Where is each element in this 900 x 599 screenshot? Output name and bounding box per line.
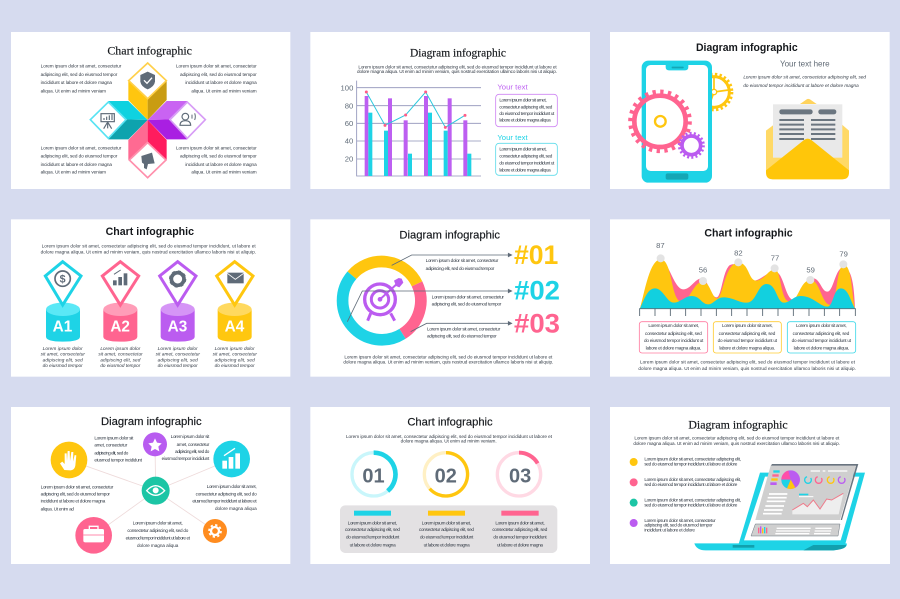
node: gear	[203, 519, 227, 543]
title: Diagram infographic	[410, 46, 506, 60]
list item: pink	[630, 477, 741, 487]
callout: cyan: labore et dolore magna aliqua	[499, 167, 551, 172]
caption panel: consectetur adipiscing elit, sed	[419, 527, 474, 532]
footer text: dolore magna aliqua. Ut enim ad minim veniam, quis nostrud exercitation ullamco laboris nisi ut aliquip.	[343, 360, 553, 365]
column: A2: sit amet, consectetur	[98, 351, 143, 356]
area chart: 82	[734, 248, 743, 257]
panel: bar and line chart	[310, 32, 590, 189]
column: A4	[213, 262, 257, 368]
panel: four cylinders	[11, 219, 290, 377]
title: Chart infographic	[106, 226, 194, 238]
text block: right	[192, 484, 257, 511]
ring: 01: 01	[362, 465, 385, 487]
text block: bottom left	[41, 146, 122, 175]
text block: right: dolore magna aliqua	[215, 506, 257, 511]
caption panel: do eiusmod tempor incididunt	[346, 534, 400, 539]
list item: purple	[630, 518, 716, 532]
callout box: cyan: do eiusmod tempor incididunt ut	[792, 338, 852, 343]
panel: hub and spoke diagram	[11, 407, 290, 564]
area chart: 59	[806, 265, 815, 274]
node: hand	[51, 442, 87, 478]
column: A1: A1	[53, 319, 73, 336]
footer text	[343, 354, 553, 365]
intro text: Lorem ipsum dolor sit amet, consectetur adipiscing elit, sed do eiusmod tempor incididunt, ut labore et	[42, 244, 256, 249]
callout box: yellow: do eiusmod tempor incididunt ut	[718, 338, 778, 343]
text block: hand: eiusmod tempor incididunt	[94, 458, 143, 463]
area chart: 56	[699, 265, 707, 274]
column: A3: A3	[168, 319, 187, 336]
text block: star	[162, 434, 210, 461]
intro text: dolore magna aliqua. Ut enim ad minim veniam, quis nostrud exercitation ullamco laboris nisi ut aliquip.	[633, 441, 840, 446]
text block: 02	[432, 295, 504, 307]
text block: hand: Lorem ipsum dolor sit	[94, 436, 134, 441]
number: #03: #03	[514, 308, 560, 338]
panel: target ring diagram	[310, 219, 590, 377]
callout: cyan: do eiusmod tempor incididunt ut	[499, 160, 555, 165]
callout box: cyan	[787, 322, 856, 353]
text block: top left: adipiscing elit, sed do eiusmod tempor	[41, 72, 118, 77]
text block: bottom: Lorem ipsum dolor sit amet,	[133, 521, 183, 526]
text block: star: Lorem ipsum dolor sit	[171, 434, 210, 439]
text block: top right: Lorem ipsum dolor sit amet, consectetur	[176, 63, 257, 68]
callout: purple: labore et dolore magna aliqua	[499, 118, 551, 123]
callout: purple: Your text	[497, 83, 529, 92]
text block: 01: adipiscing elit, sed do eiusmod tempor	[426, 266, 495, 271]
title: Diagram infographic	[696, 42, 798, 54]
list item: purple: Lorem ipsum dolor sit amet, consectetur	[644, 518, 716, 523]
caption panel	[340, 505, 557, 553]
area chart: 77	[771, 254, 779, 263]
callout box: pink	[639, 322, 708, 353]
intro text: dolore magna aliqua. Ut enim ad minim veniam, quis nostrud exercitation ullamco laboris nisi ut aliquip.	[41, 250, 256, 255]
bar chart: 80	[345, 101, 353, 110]
column: A3: adipiscing elit, sed	[158, 357, 198, 362]
intro text	[346, 434, 553, 444]
callout box: yellow: labore et dolore magna aliqua.	[719, 346, 775, 351]
text block: top left: incididunt ut labore et dolore magna	[41, 80, 112, 85]
text block: hand: adipiscing elit, sed do	[94, 450, 129, 455]
intro text	[357, 64, 557, 74]
list item: yellow: sed do eiusmod tempor incididunt ut labore et dolore	[644, 462, 738, 467]
text block: bottom left: aliqua. Ut enim ad minim veniam	[41, 170, 106, 175]
number: #02: #02	[514, 275, 560, 305]
petal: cyan with presentation icon	[90, 101, 148, 139]
column: A1: adipiscing elit, sed	[43, 357, 83, 362]
area chart	[639, 241, 856, 316]
text block: 03: adipiscing elit, sed do eiusmod tempor	[427, 333, 497, 338]
callout: purple: Lorem ipsum dolor sit amet,	[499, 98, 547, 103]
text block: bottom: eiusmod tempor incididunt ut labore et	[126, 535, 191, 540]
ring: 02	[424, 453, 468, 496]
column: A3: Lorem ipsum dolor	[158, 346, 198, 351]
list item: purple: incididunt ut labore et dolore	[644, 527, 695, 532]
column: A2: A2	[110, 319, 130, 336]
caption panel: consectetur adipiscing elit, sed	[492, 527, 548, 532]
callout box: cyan: Lorem ipsum dolor sit amet,	[796, 323, 847, 328]
callout: cyan: Lorem ipsum dolor sit amet,	[499, 146, 547, 151]
text block: left: incididunt ut labore et dolore magna	[41, 499, 106, 504]
text block: bottom left: Lorem ipsum dolor sit amet, consectetur	[41, 146, 122, 151]
panel: progress rings	[310, 407, 590, 564]
title: Chart infographic	[407, 417, 493, 429]
column: A1: Lorem ipsum dolor	[43, 346, 83, 351]
list item: teal: Lorem ipsum dolor sit amet, consectetur adipiscing elit,	[644, 498, 741, 503]
callout: cyan: consectetur adipiscing elit, sed	[499, 153, 553, 158]
text block: Lorem ipsum dolor sit amet, consectetur adipiscing elit, sed	[743, 74, 866, 79]
list item: purple: adipiscing elit, sed do eiusmod tempor	[644, 523, 713, 528]
text block: bottom: consectetur adipiscing elit, sed do	[127, 528, 189, 533]
text block: right: consectetur adipiscing elit, sed do	[196, 492, 257, 497]
column: A3: sit amet, consectetur	[156, 351, 200, 356]
caption panel: do eiusmod tempor incididunt	[493, 534, 547, 539]
ring: 03: 03	[509, 465, 531, 487]
petal: pink with megaphone icon	[128, 120, 167, 178]
node: star	[143, 432, 167, 456]
column: A4: A4	[225, 319, 245, 336]
title: Diagram infographic	[399, 230, 501, 242]
text block: 01: Lorem ipsum dolor sit amet, consectetur	[426, 258, 499, 263]
subheading: Your text here	[780, 59, 830, 68]
node: briefcase	[75, 517, 112, 554]
text block: 03	[427, 326, 501, 338]
callout box: cyan: labore et dolore magna aliqua.	[794, 346, 849, 351]
footer text: Lorem ipsum dolor sit amet, consectetur adipiscing elit, sed do eiusmod tempor incididunt ut labore et	[344, 354, 553, 359]
icon: phone	[642, 61, 712, 183]
column: A4: adipiscing elit, sed	[215, 357, 255, 362]
panel: laptop dashboard	[610, 407, 890, 564]
text block: bottom right: incididunt ut labore et dolore magna	[185, 162, 257, 167]
icon: purple gear	[679, 133, 703, 157]
intro text	[41, 244, 256, 255]
footer text: Lorem ipsum dolor sit amet, consectetur adipiscing elit, sed do eiusmod tempor incididunt ut labore et	[640, 360, 856, 365]
text block: top right: adipiscing elit, sed do eiusmod tempor	[180, 72, 257, 77]
title: Diagram infographic	[688, 417, 788, 431]
text block: 02: adipiscing elit, sed do eiusmod tempor	[432, 302, 502, 307]
callout box: yellow	[713, 322, 781, 353]
callout: purple: do eiusmod tempor incididunt ut	[499, 111, 555, 116]
text block: left: Lorem ipsum dolor sit amet, consectetur	[41, 484, 114, 489]
panel: phone gears and envelope	[610, 32, 890, 189]
text block: bottom: dolore magna aliqua	[137, 543, 179, 548]
text block: 03: Lorem ipsum dolor sit amet, consectetur	[427, 326, 501, 331]
callout: cyan: Your text	[497, 133, 529, 142]
column: A3: do eiusmod tempor	[158, 363, 198, 368]
petal: yellow with shield icon	[128, 63, 167, 120]
caption panel: Lorem ipsum dolor sit amet,	[422, 520, 471, 525]
text block: do eiusmod tempor incididunt ut labore et dolore magna	[743, 83, 859, 88]
column: A2: adipiscing elit, sed	[100, 357, 141, 362]
text block: bottom left: incididunt ut labore et dolore magna	[41, 162, 112, 167]
text block: top right	[176, 63, 257, 93]
text block: top left: aliqua. Ut enim ad minim veniam	[41, 88, 106, 93]
callout: cyan	[496, 133, 557, 175]
bar chart: 20	[345, 155, 353, 164]
icon: pink gear	[630, 92, 690, 151]
node: centre eye	[142, 477, 170, 505]
callout: purple: consectetur adipiscing elit, sed	[499, 105, 553, 110]
text block	[743, 74, 866, 88]
caption panel: ut labore et dolore magna	[350, 542, 396, 547]
text block: star: eiusmod tempor incididunt	[162, 456, 210, 461]
bar chart: 60	[345, 119, 353, 128]
text block: bottom right	[176, 146, 257, 175]
text block: hand	[94, 436, 143, 463]
column: A3	[156, 262, 200, 368]
icon: envelope	[766, 99, 849, 179]
text block: top left	[41, 63, 122, 93]
icon: yellow gear	[696, 74, 732, 110]
leader lines with arrows	[347, 253, 512, 332]
callout box: cyan: consectetur adipiscing elit, sed	[793, 331, 850, 336]
panel: area chart	[610, 219, 890, 377]
footer text: dolore magna aliqua. Ut enim ad minim veniam, quis nostrud exercitation ullamco laboris nisi ut aliquip.	[638, 366, 856, 371]
column: A2: Lorem ipsum dolor	[100, 346, 141, 351]
text block: bottom right: Lorem ipsum dolor sit amet, consectetur	[176, 146, 257, 151]
caption panel: ut labore et dolore magna	[497, 542, 543, 547]
caption panel: ut labore et dolore magna	[424, 542, 470, 547]
list item: yellow	[630, 457, 741, 467]
title: Diagram infographic	[101, 416, 202, 428]
text block: star: amet, consectetur	[177, 442, 210, 447]
callout box: pink: Lorem ipsum dolor sit amet,	[648, 323, 699, 328]
caption panel: Lorem ipsum dolor sit amet,	[495, 520, 545, 525]
callout box: pink: do eiusmod tempor incididunt ut	[644, 338, 704, 343]
ring: 03	[497, 453, 541, 496]
text block: left	[41, 484, 114, 511]
intro text: dolore magna aliqua. Ut enim ad minim veniam, quis nostrud exercitation ullamco laboris nisi ut aliquip.	[357, 69, 557, 74]
callout box: yellow: consectetur adipiscing elit, sed	[719, 331, 776, 336]
text block: hand: amet, consectetur	[94, 443, 128, 448]
donut chart	[343, 262, 421, 340]
footer text	[638, 360, 856, 371]
ring: 02: 02	[435, 465, 457, 487]
text block: bottom	[126, 521, 191, 548]
intro text: Lorem ipsum dolor sit amet, consectetur adipiscing elit, sed do eiusmod tempor incididunt ut labore et	[358, 64, 557, 69]
title: Chart infographic	[704, 228, 793, 240]
ring: 01	[352, 453, 395, 496]
column: A1: do eiusmod tempor	[43, 363, 83, 368]
intro text: dolore magna aliqua. Ut enim ad minim veniam.	[401, 439, 497, 444]
caption panel: do eiusmod tempor incididunt	[420, 534, 474, 539]
list item: pink: sed do eiusmod tempor incididunt ut labore et dolore	[644, 482, 738, 487]
text block: top left: Lorem ipsum dolor sit amet, consectetur	[41, 63, 122, 68]
illustration: laptop	[694, 464, 865, 550]
list item: teal	[630, 498, 741, 507]
column: A2: do eiusmod tempor	[100, 363, 141, 368]
text block: 01	[426, 258, 499, 271]
callout: purple	[496, 83, 557, 127]
text block: right: eiusmod tempor incididunt ut labore et	[192, 499, 257, 504]
title: Chart infographic	[107, 43, 192, 57]
text block: bottom right: adipiscing elit, sed do eiusmod tempor	[180, 154, 257, 159]
callout box: pink: labore et dolore magna aliqua.	[646, 346, 701, 351]
text block: 02: Lorem ipsum dolor sit amet, consectetur	[432, 295, 504, 300]
column: A4: sit amet, consectetur	[213, 351, 257, 356]
bar chart: 100	[341, 83, 353, 92]
column: A4: Lorem ipsum dolor	[215, 346, 255, 351]
text block: left: aliqua. Ut enim ad	[41, 506, 74, 511]
column: A1	[41, 262, 85, 368]
bar chart: 40	[345, 137, 353, 146]
caption panel: Lorem ipsum dolor sit amet,	[348, 520, 397, 525]
bar chart	[341, 81, 481, 176]
intro text: Lorem ipsum dolor sit amet, consectetur adipiscing elit, sed do eiusmod tempor incididunt ut labore et	[634, 436, 840, 441]
icon: target	[365, 278, 403, 321]
text block: star: adipiscing elit, sed do	[175, 449, 210, 454]
column: A1: sit amet, consectetur	[41, 351, 85, 356]
column: A4: do eiusmod tempor	[215, 363, 255, 368]
caption panel: consectetur adipiscing elit, sed	[345, 527, 400, 532]
column: A1: $	[60, 274, 66, 286]
text block: left: adipiscing elit, sed do eiusmod tempor	[41, 492, 110, 497]
area chart: 79	[839, 250, 848, 259]
list item: yellow: Lorem ipsum dolor sit amet, consectetur adipiscing elit,	[644, 457, 741, 462]
petal: purple with user icon	[148, 101, 205, 139]
node: growth chart	[213, 441, 250, 477]
text block: bottom right: aliqua. Ut enim ad minim veniam	[191, 170, 257, 175]
spokes	[69, 444, 232, 535]
intro text: Lorem ipsum dolor sit amet, consectetur adipiscing elit, sed do eiusmod tempor incididunt ut labore et	[346, 434, 553, 439]
text block: bottom left: adipiscing elit, sed do eiusmod tempor	[41, 154, 118, 159]
text block: top right: incididunt ut labore et dolore magna	[185, 80, 257, 85]
list item: teal: sed do eiusmod tempor incididunt ut labore et dolore	[644, 502, 738, 507]
number: #01: #01	[514, 240, 558, 270]
panel: chart infographic with petals	[11, 32, 290, 189]
callout box: pink: consectetur adipiscing elit, sed	[645, 331, 702, 336]
column: A2	[98, 262, 143, 368]
area chart: 87	[656, 241, 665, 250]
intro text	[633, 436, 840, 446]
list item: pink: Lorem ipsum dolor sit amet, consectetur adipiscing elit,	[644, 477, 741, 482]
text block: top right: aliqua. Ut enim ad minim veniam	[191, 88, 257, 93]
callout box: yellow: Lorem ipsum dolor sit amet,	[722, 323, 773, 328]
text block: right: Lorem ipsum dolor sit amet,	[207, 484, 257, 489]
